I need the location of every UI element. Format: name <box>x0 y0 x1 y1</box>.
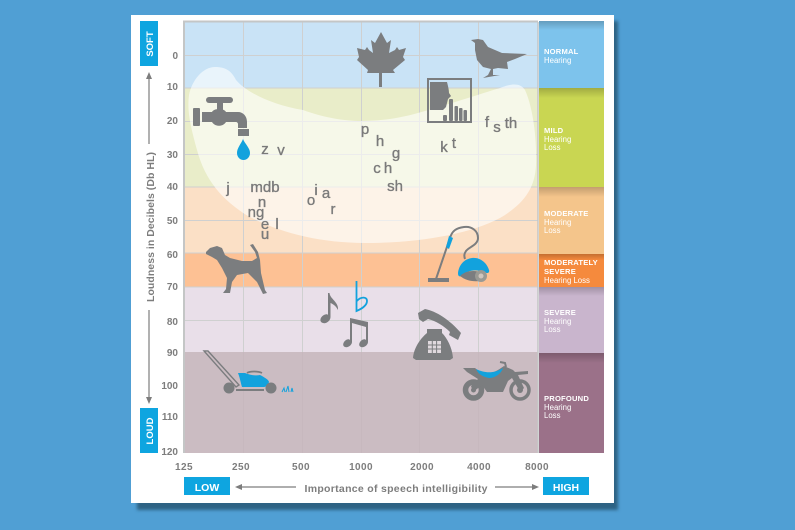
y axis values: 20 <box>167 116 178 127</box>
x axis values <box>175 462 549 473</box>
y axis values: 100 <box>161 381 178 392</box>
speech sound letters: c <box>373 160 381 177</box>
x axis values: 4000 <box>467 462 491 473</box>
legend panel: moderate: Loss <box>544 226 561 235</box>
speech sound letters: mdb <box>250 179 280 196</box>
speech sound letters: l <box>275 216 279 233</box>
high tag: HIGH <box>553 482 579 494</box>
band: normal <box>184 22 538 88</box>
speech sound letters: r <box>330 201 336 218</box>
legend panel: moderately severe: Hearing Loss <box>544 276 590 285</box>
high tag <box>543 477 589 495</box>
speech sound letters: n <box>258 194 266 211</box>
y axis values: 40 <box>167 182 178 193</box>
legend panel: severe: SEVERE <box>544 308 576 317</box>
low tag: LOW <box>195 482 219 494</box>
icon: telephone <box>413 309 461 360</box>
x axis values: 125 <box>175 462 193 473</box>
y axis values: 80 <box>167 317 178 328</box>
legend panel: profound <box>539 353 604 453</box>
speech sound letters: s <box>493 119 501 136</box>
icon: eighth note <box>320 293 338 323</box>
speech sound letters: v <box>277 142 285 159</box>
soft tag: SOFT <box>145 31 156 57</box>
speech sound letters <box>225 114 517 243</box>
speech sound letters: a <box>322 185 331 202</box>
legend panel: mild: Hearing <box>544 135 571 144</box>
chart plot <box>184 22 538 453</box>
speech sound letters: sh <box>387 178 403 195</box>
card <box>131 15 614 503</box>
speech sound letters: p <box>361 121 369 138</box>
legend panel: severe: Hearing <box>544 317 571 326</box>
speech sound letters: i <box>314 182 318 199</box>
legend panel: severe <box>539 287 604 353</box>
y axis values: 50 <box>167 216 178 227</box>
speech sound letters: e <box>261 216 269 233</box>
y axis values: 70 <box>167 282 178 293</box>
icon: maple leaf <box>357 32 406 87</box>
legend panel: moderate: MODERATE <box>544 209 588 218</box>
icon: motorcycle <box>463 362 529 399</box>
card shadow <box>137 21 618 510</box>
legend panel: moderately severe: SEVERE <box>544 267 576 276</box>
icon: beamed notes <box>343 318 368 347</box>
icon: lawn mower <box>204 351 293 394</box>
legend panel: severe: Loss <box>544 325 561 334</box>
band: profound <box>184 352 538 453</box>
legend panel: moderate <box>539 187 604 254</box>
speech sound letters: u <box>261 226 269 243</box>
soft tag <box>140 21 158 66</box>
band: moderate <box>184 187 538 253</box>
legend panel: moderate: Hearing <box>544 218 571 227</box>
speech sound letters: o <box>307 192 315 209</box>
speech banana <box>188 67 536 243</box>
y axis values: 30 <box>167 150 178 161</box>
x axis values: 2000 <box>410 462 434 473</box>
legend panel: profound: Loss <box>544 411 561 420</box>
speech sound letters: t <box>452 135 457 152</box>
loud tag: LOUD <box>145 417 156 444</box>
y axis values: 10 <box>167 82 178 93</box>
speech sound letters: z <box>261 141 269 158</box>
low tag <box>184 477 230 495</box>
icon: flat symbol <box>356 281 367 311</box>
y axis values <box>161 51 178 458</box>
x axis values: 1000 <box>349 462 373 473</box>
band: moderately severe <box>184 253 538 287</box>
y axis values: 120 <box>161 447 178 458</box>
speech sound letters: ng <box>248 204 264 221</box>
legend panel: normal: NORMAL <box>544 47 579 56</box>
legend panel: mild: MILD <box>544 126 564 135</box>
x axis title: Importance of speech intelligibility <box>304 483 488 495</box>
legend panel: profound: PROFOUND <box>544 394 589 403</box>
speech sound letters: g <box>392 145 400 162</box>
icon: water drop <box>237 139 250 160</box>
speech sound letters: j <box>225 180 230 197</box>
legend panel: normal <box>539 21 604 88</box>
legend panel: profound: Hearing <box>544 403 571 412</box>
y axis values: 110 <box>162 412 178 423</box>
y axis values: 0 <box>172 51 178 62</box>
arrow: up to soft <box>146 72 152 144</box>
x axis values: 500 <box>292 462 310 473</box>
y axis title: Loudness in Decibels (Db HL) <box>145 152 157 302</box>
legend panel: moderately severe: MODERATELY <box>544 258 598 267</box>
x axis values: 8000 <box>525 462 549 473</box>
icon: mouth box <box>428 79 471 122</box>
speech sound letters: th <box>505 115 517 132</box>
loud tag <box>140 408 158 453</box>
icon: bird <box>471 39 527 78</box>
legend panel: mild: Loss <box>544 143 561 152</box>
arrow: down to loud <box>146 310 152 404</box>
legend panel: normal: Hearing <box>544 56 571 65</box>
band: mild <box>184 88 538 187</box>
y axis values: 60 <box>167 250 178 261</box>
y axis values: 90 <box>167 348 178 359</box>
arrow: toward low <box>235 484 296 490</box>
speech sound letters: h <box>384 160 392 177</box>
icon: vacuum cleaner <box>428 227 489 282</box>
band: severe <box>184 287 538 352</box>
x axis values: 250 <box>232 462 250 473</box>
speech sound letters: k <box>440 139 448 156</box>
arrow: toward high <box>495 484 539 490</box>
legend panel: mild <box>539 88 604 187</box>
icon: dog <box>206 244 267 294</box>
speech sound letters: f <box>485 114 490 131</box>
legend panel: moderately severe <box>539 254 604 287</box>
icon: faucet <box>193 97 250 160</box>
speech sound letters: h <box>376 133 384 150</box>
